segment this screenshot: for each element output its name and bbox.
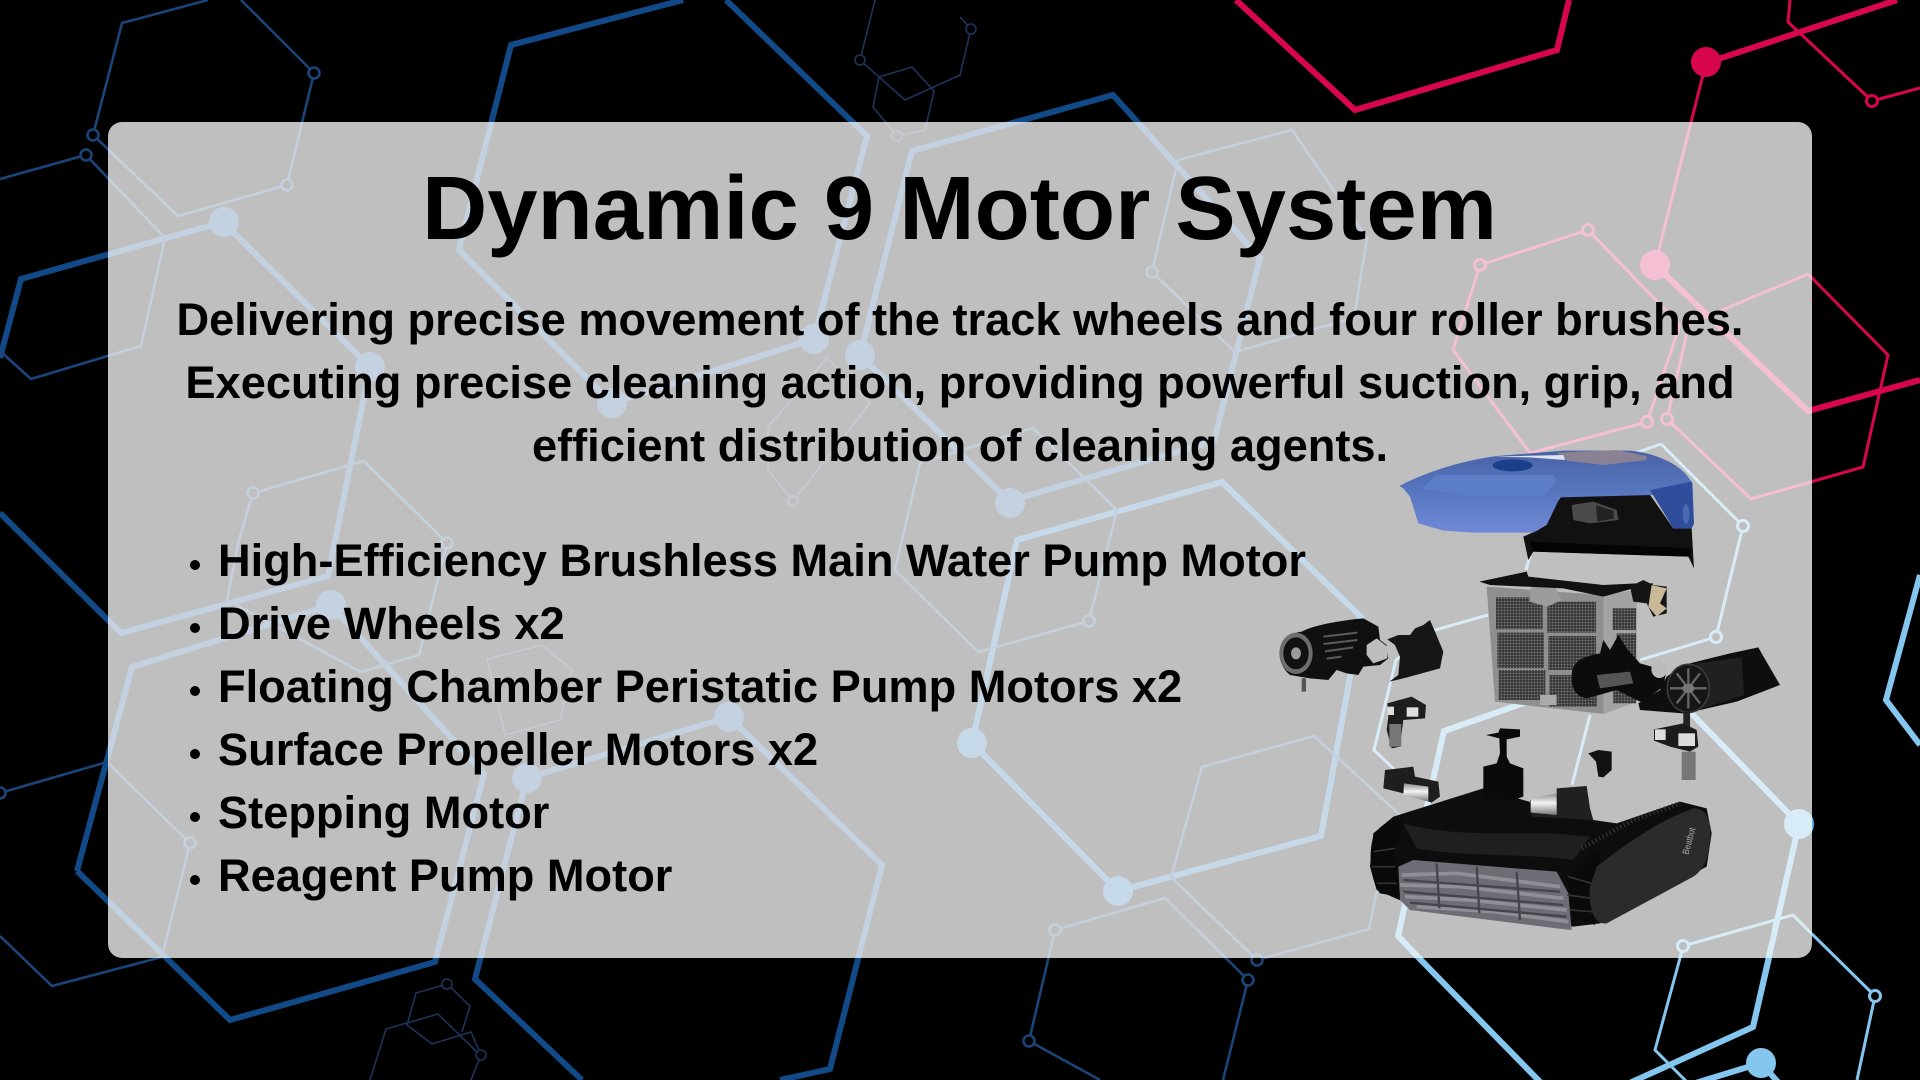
title: Dynamic 9 Motor System xyxy=(422,158,1497,259)
list item: drive wheels: Drive Wheels x2 xyxy=(218,598,565,649)
dark blue thin hexagons xyxy=(0,0,1400,1080)
intro paragraph: efficient distribution of cleaning agents. xyxy=(532,420,1388,471)
list item: surface propellers: Surface Propeller Motors x2 xyxy=(218,724,818,775)
intro paragraph: Executing precise cleaning action, providing powerful suction, grip, and xyxy=(185,357,1735,408)
motor list xyxy=(190,535,1306,901)
list item: reagent pump: Reagent Pump Motor xyxy=(218,850,672,901)
light blue hexagons xyxy=(1398,640,1799,1027)
list item: main water pump: High-Efficiency Brushless Main Water Pump Motor xyxy=(218,535,1306,586)
brush drive motors and centre pump xyxy=(1383,728,1593,820)
intro paragraph xyxy=(177,294,1743,471)
robot lid xyxy=(1399,450,1694,568)
robot base with tracks and brushes: Beatbot xyxy=(1680,826,1698,856)
small rear piece xyxy=(1588,750,1612,777)
panel: translucent content card xyxy=(108,122,1812,958)
robot base with tracks and brushes xyxy=(1370,788,1712,930)
faint small hexagons xyxy=(370,0,971,1080)
dark blue thick hexagons xyxy=(0,0,1260,1080)
pink hexagons xyxy=(1236,0,1920,411)
medium blue hexagon in the panel xyxy=(972,482,1361,891)
left propeller motor and cover xyxy=(1279,618,1443,692)
exploded robot illustration xyxy=(1279,450,1780,930)
left upper gear motor xyxy=(1387,697,1426,748)
list item: stepping motor: Stepping Motor xyxy=(218,787,549,838)
right lower gear motor xyxy=(1654,712,1698,780)
filter basket with right motor xyxy=(1479,572,1780,714)
list item: peristatic pumps: Floating Chamber Peristatic Pump Motors x2 xyxy=(218,661,1182,712)
light blue segments outside the panel xyxy=(1419,575,1920,1080)
intro paragraph: Delivering precise movement of the track wheels and four roller brushes. xyxy=(177,294,1743,345)
